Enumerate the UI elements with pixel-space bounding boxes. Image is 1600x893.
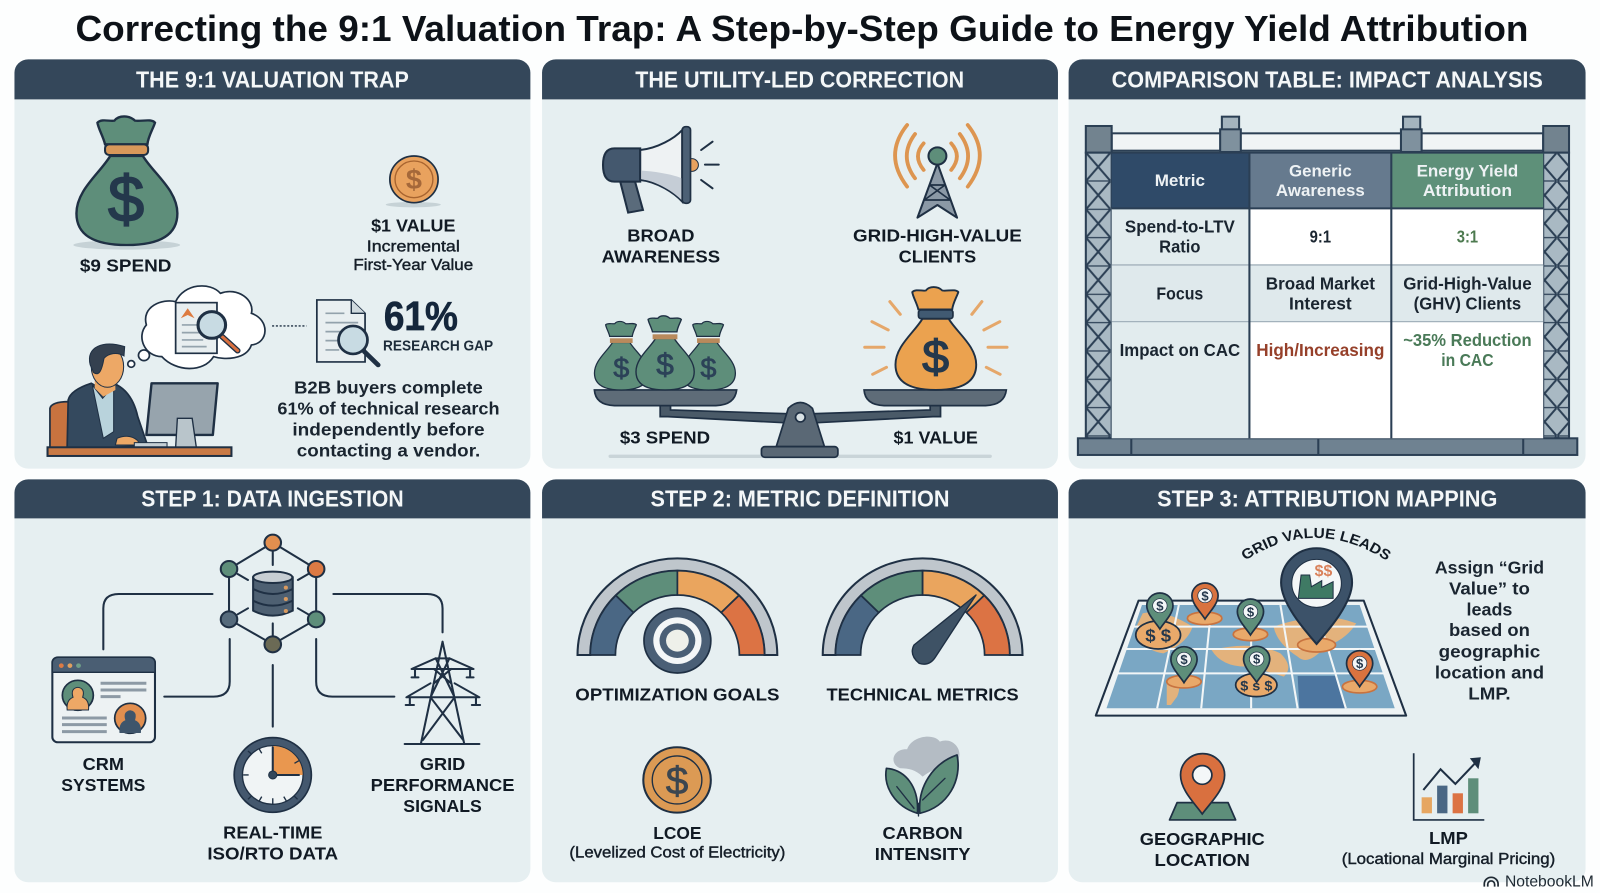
table row: focus bbox=[1156, 274, 1532, 313]
table row: focus: Broad Market bbox=[1266, 274, 1375, 293]
label: real-time ISO/RTO data: REAL-TIME bbox=[223, 822, 322, 842]
icon: LMP chart bbox=[1414, 753, 1484, 820]
icon: data hub bbox=[221, 535, 324, 652]
icon: leaves and cloud bbox=[886, 737, 959, 816]
label: CRM systems: SYSTEMS bbox=[61, 774, 145, 795]
transmission frame bbox=[1078, 117, 1577, 455]
text block: assign grid value: LMP. bbox=[1468, 684, 1511, 703]
icon: three green money bags bbox=[594, 316, 735, 390]
icon: three green money bags: $ bbox=[656, 347, 674, 382]
map pins: $ $ bbox=[1145, 625, 1171, 645]
label: $1 value: $1 VALUE bbox=[894, 427, 978, 447]
icon: signal tower bbox=[895, 125, 980, 218]
table row: impact on CAC: in CAC bbox=[1441, 350, 1494, 370]
label: $1 value bbox=[353, 215, 473, 274]
table row: spend-to-LTV ratio: Spend-to-LTV bbox=[1125, 217, 1235, 237]
table grid bbox=[1112, 153, 1543, 438]
text block: research description: independently before bbox=[292, 420, 485, 439]
icon: orange money bag with rays bbox=[865, 287, 1007, 390]
map pins: $ bbox=[1356, 656, 1363, 671]
icon: large money bag: $ bbox=[108, 164, 144, 236]
panel: step 1 data ingestion bbox=[14, 479, 530, 882]
icon: large money bag bbox=[73, 116, 180, 250]
table row: focus: Interest bbox=[1289, 294, 1352, 313]
label: grid performance signals: GRID bbox=[420, 753, 465, 774]
table header text: Metric bbox=[1155, 171, 1205, 190]
stat: 61% research gap bbox=[383, 294, 493, 355]
label: carbon intensity: CARBON bbox=[882, 822, 963, 843]
map pins: $ bbox=[1253, 652, 1260, 667]
text block: assign grid value: location and bbox=[1435, 663, 1544, 682]
label: LCOE: (Levelized Cost of Electricity) bbox=[569, 845, 785, 861]
table header text: Attribution bbox=[1423, 181, 1512, 200]
label: broad awareness: BROAD bbox=[627, 225, 694, 246]
label: broad awareness: AWARENESS bbox=[602, 246, 720, 267]
label: CRM systems bbox=[61, 753, 145, 795]
watermark: NotebookLM: NotebookLM bbox=[1505, 873, 1594, 891]
table row: impact on CAC: Impact on CAC bbox=[1120, 340, 1240, 360]
label: LCOE bbox=[569, 822, 785, 861]
icon: megaphone bbox=[603, 127, 719, 213]
map pins: $ bbox=[1180, 652, 1188, 667]
heading: THE UTILITY-LED CORRECTION bbox=[635, 68, 964, 94]
label: geographic location: LOCATION bbox=[1155, 849, 1250, 870]
label: grid-high-value clients: CLIENTS bbox=[899, 246, 976, 267]
table header text bbox=[1155, 162, 1518, 200]
text block: assign grid value: Assign “Grid bbox=[1435, 558, 1544, 577]
label: real-time ISO/RTO data bbox=[207, 822, 338, 863]
text block: research description bbox=[277, 378, 500, 460]
table row: spend-to-LTV ratio: Ratio bbox=[1159, 237, 1201, 257]
heading: COMPARISON TABLE: IMPACT ANALYSIS bbox=[1112, 68, 1543, 94]
label: geographic location: GEOGRAPHIC bbox=[1140, 828, 1265, 849]
icon: optimization gauge with target bbox=[578, 558, 777, 673]
label: LMP: (Locational Marginal Pricing) bbox=[1342, 851, 1555, 868]
connectors bbox=[103, 594, 443, 727]
label: $9 spend: $9 SPEND bbox=[80, 255, 172, 276]
stat: 61% research gap: 61% bbox=[384, 294, 458, 339]
title: Correcting the 9:1 Valuation Trap: A Step-by-Step Guide to Energy Yield Attribution bbox=[76, 8, 1528, 49]
label: $1 value: Incremental bbox=[367, 239, 460, 256]
label: $3 spend: $3 SPEND bbox=[620, 427, 710, 447]
table row: impact on CAC bbox=[1120, 330, 1532, 370]
text block: research description: B2B buyers complete bbox=[294, 378, 483, 397]
text block: assign grid value: geographic bbox=[1439, 642, 1540, 661]
label: technical metrics: TECHNICAL METRICS bbox=[827, 684, 1019, 705]
heading: STEP 3: ATTRIBUTION MAPPING bbox=[1157, 487, 1497, 513]
stat: 61% research gap: RESEARCH GAP bbox=[383, 339, 493, 355]
panel: the utility-led correction bbox=[542, 59, 1058, 469]
icon: three green money bags: $ bbox=[613, 353, 629, 384]
icon: location pin bbox=[1170, 754, 1236, 820]
table row: spend-to-LTV ratio: 3:1 bbox=[1457, 226, 1478, 247]
icon: coin bbox=[386, 156, 441, 207]
heading: STEP 2: METRIC DEFINITION bbox=[651, 487, 949, 513]
text block: assign grid value: based on bbox=[1449, 620, 1530, 640]
icon: document with magnifier bbox=[317, 300, 378, 365]
label: LMP bbox=[1342, 827, 1555, 868]
text block: assign grid value: leads bbox=[1467, 600, 1513, 619]
label: $1 value: First-Year Value bbox=[353, 257, 473, 274]
label: grid performance signals bbox=[371, 753, 515, 816]
label: carbon intensity bbox=[875, 822, 970, 864]
icon: three green money bags: $ bbox=[700, 353, 717, 384]
icon: clock bbox=[234, 738, 311, 812]
table row: spend-to-LTV ratio: 9:1 bbox=[1310, 226, 1331, 247]
label: grid performance signals: PERFORMANCE bbox=[371, 774, 515, 795]
icon: balance scale bbox=[594, 390, 1006, 458]
heading: THE 9:1 VALUATION TRAP bbox=[136, 68, 409, 94]
label: grid-high-value clients: GRID-HIGH-VALUE bbox=[853, 225, 1022, 246]
table row: impact on CAC: ~35% Reduction bbox=[1403, 330, 1532, 350]
icon: person at desk with thought cloud bbox=[48, 286, 265, 456]
label: optimization goals: OPTIMIZATION GOALS bbox=[575, 684, 780, 705]
map pins: $ bbox=[1156, 599, 1164, 613]
map bbox=[1096, 601, 1406, 716]
label: geographic location bbox=[1140, 828, 1265, 870]
icon: LCOE coin: $ bbox=[666, 760, 688, 803]
label: CRM systems: CRM bbox=[83, 753, 124, 774]
icon: LCOE coin bbox=[643, 747, 711, 813]
panel: step 2 metric definition bbox=[542, 479, 1058, 882]
table row: impact on CAC: High/Increasing bbox=[1256, 340, 1384, 360]
table header text: Energy Yield bbox=[1417, 162, 1518, 181]
label: grid-high-value clients bbox=[853, 225, 1022, 267]
panel: step 3 attribution mapping bbox=[1068, 479, 1594, 891]
icon: transmission pylon bbox=[405, 642, 480, 744]
table header text: Awareness bbox=[1276, 181, 1365, 200]
icon: grid value large pin: $$ bbox=[1315, 563, 1333, 580]
heading: STEP 1: DATA INGESTION bbox=[141, 487, 404, 513]
label: LCOE: LCOE bbox=[653, 822, 702, 843]
icon: grid value large pin bbox=[1281, 548, 1352, 652]
icon: coin: $ bbox=[406, 164, 422, 196]
panel: comparison table bbox=[1069, 59, 1586, 469]
text block: research description: contacting a vendor. bbox=[297, 441, 480, 460]
table header text: Generic bbox=[1289, 162, 1352, 181]
map pins: $ bbox=[1247, 605, 1254, 619]
icon: orange money bag with rays: $ bbox=[922, 331, 949, 383]
table row: focus: (GHV) Clients bbox=[1414, 294, 1521, 313]
table row: focus: Grid-High-Value bbox=[1403, 274, 1532, 293]
icon: CRM window bbox=[52, 657, 155, 742]
map pins bbox=[1136, 583, 1377, 697]
label: real-time ISO/RTO data: ISO/RTO DATA bbox=[207, 843, 338, 863]
icon: technical metrics gauge with needle bbox=[823, 558, 1022, 664]
table row: spend-to-LTV ratio bbox=[1125, 217, 1478, 257]
label: carbon intensity: INTENSITY bbox=[875, 843, 970, 864]
panel: the 9:1 valuation trap bbox=[14, 59, 530, 469]
table row: focus: Focus bbox=[1156, 284, 1203, 303]
label: grid performance signals: SIGNALS bbox=[403, 795, 482, 816]
text block: assign grid value: Value” to bbox=[1449, 579, 1530, 598]
text block: assign grid value bbox=[1435, 558, 1544, 703]
text block: research description: 61% of technical research bbox=[277, 399, 500, 418]
map pins: $ bbox=[1201, 589, 1209, 603]
label: broad awareness bbox=[602, 225, 720, 267]
curved label: grid value leads: GRID VALUE LEADS bbox=[1242, 528, 1390, 560]
dotted connector bbox=[272, 324, 307, 328]
label: $1 value: $1 VALUE bbox=[371, 215, 455, 236]
label: LMP: LMP bbox=[1429, 827, 1468, 848]
map pins: $ s $ bbox=[1240, 679, 1272, 695]
